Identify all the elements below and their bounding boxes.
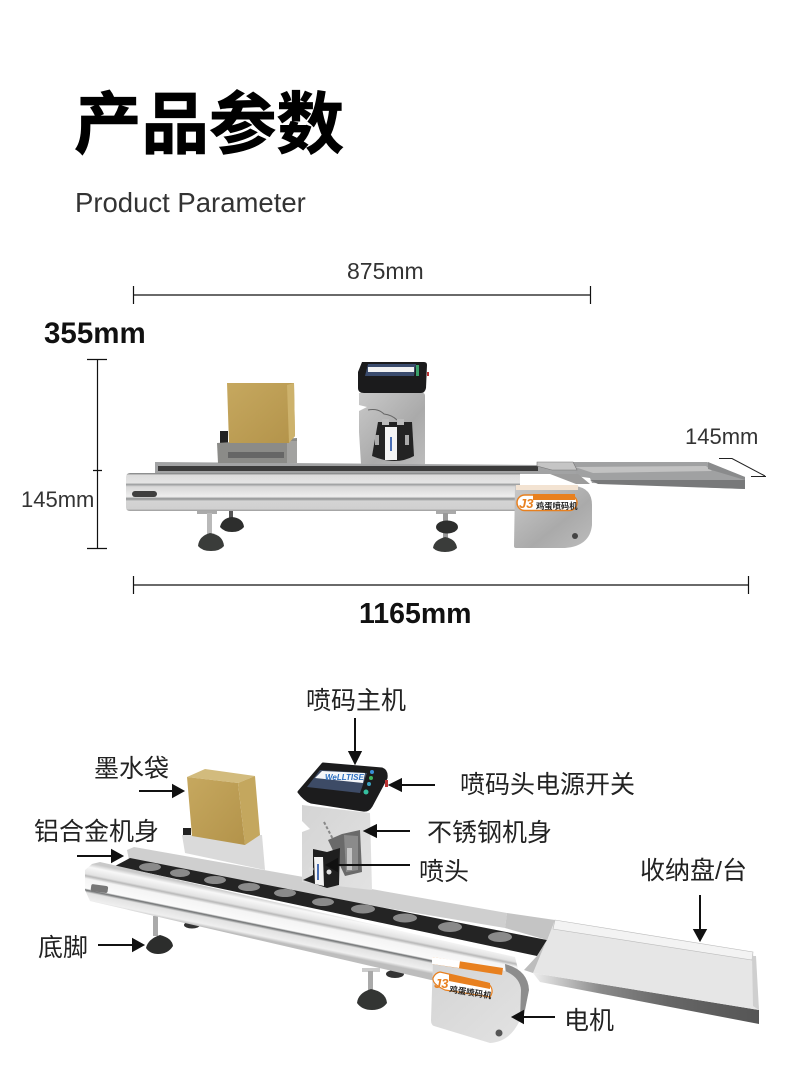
- controller screen: [299, 764, 388, 810]
- dimension: 875mm width: 875mm: [347, 258, 424, 284]
- foot: right pair: [433, 510, 458, 552]
- dimension: 145mm tray depth: [685, 424, 766, 476]
- stainless bracket: [359, 393, 425, 464]
- arrow: to ink bag: [139, 786, 183, 796]
- rear rail: [127, 847, 507, 928]
- stainless bracket: [302, 805, 372, 890]
- tray: side view: [560, 462, 745, 489]
- ink bag box: [227, 383, 295, 443]
- print head: [303, 830, 362, 888]
- foot: front left: [197, 510, 224, 551]
- tray: perspective: [533, 920, 759, 1024]
- conveyor belt: [115, 858, 547, 956]
- arrow: to motor: [513, 1012, 555, 1022]
- foot: left: [146, 916, 200, 954]
- controller screen: WeLLTISE: [325, 773, 364, 782]
- subtitle: Product Parameter: [75, 187, 306, 218]
- foot: rear left: [220, 510, 244, 532]
- label: 铝合金机身: 铝合金机身: [34, 818, 159, 846]
- arrow: to aluminium body: [77, 850, 122, 862]
- label: 喷头: 喷头: [419, 858, 469, 886]
- motor end plate: [431, 957, 529, 1043]
- title: 产品参数: [74, 71, 344, 168]
- label: 收纳盘/台: 收纳盘/台: [640, 857, 747, 885]
- motor end plate: J3: [434, 976, 449, 991]
- dimension: 145mm height: 145mm: [21, 487, 94, 512]
- arrow: to tray: [694, 895, 706, 940]
- foot: right: [357, 968, 404, 1010]
- dimension: 1165mm length: [134, 576, 748, 630]
- motor end plate: 鸡蛋喷码机: [449, 984, 493, 1001]
- arrow: to foot: [98, 940, 143, 950]
- arrow: to stainless body: [365, 826, 410, 836]
- ink bag box: [187, 769, 260, 845]
- dimension: 145mm tray depth: 145mm: [685, 424, 758, 449]
- dimension: 355mm height: [44, 317, 146, 548]
- belt holes: [139, 863, 512, 942]
- rear rail: [155, 462, 590, 484]
- front aluminium rail: [85, 862, 522, 985]
- label: 喷码头电源开关: 喷码头电源开关: [460, 771, 635, 799]
- rail end block: [505, 913, 555, 973]
- perspective machine: [85, 764, 759, 1043]
- aluminium rail: [126, 473, 520, 511]
- ink bag holder: [182, 828, 265, 870]
- arrow: to power switch: [390, 780, 435, 790]
- motor end plate: 鸡蛋喷码机: [536, 501, 578, 511]
- arrow: to print head: [327, 860, 410, 870]
- motor end plate: [514, 485, 592, 548]
- dimension: 1165mm length: 1165mm: [359, 598, 472, 630]
- label: 墨水袋: 墨水袋: [94, 755, 169, 783]
- label: 喷码主机: 喷码主机: [306, 687, 406, 715]
- label: 不锈钢机身: 不锈钢机身: [427, 819, 552, 847]
- ink bag holder: [217, 431, 297, 463]
- arrow: to controller: [350, 718, 360, 763]
- dimension: 355mm height: 355mm: [44, 317, 146, 350]
- label: 电机: 电机: [564, 1007, 614, 1035]
- dimension: 875mm width: [134, 258, 590, 304]
- label: 底脚: 底脚: [38, 934, 88, 962]
- motor end plate: J3: [519, 496, 534, 511]
- controller screen: [358, 362, 429, 393]
- side-view machine: [126, 362, 745, 552]
- print head: [372, 419, 414, 461]
